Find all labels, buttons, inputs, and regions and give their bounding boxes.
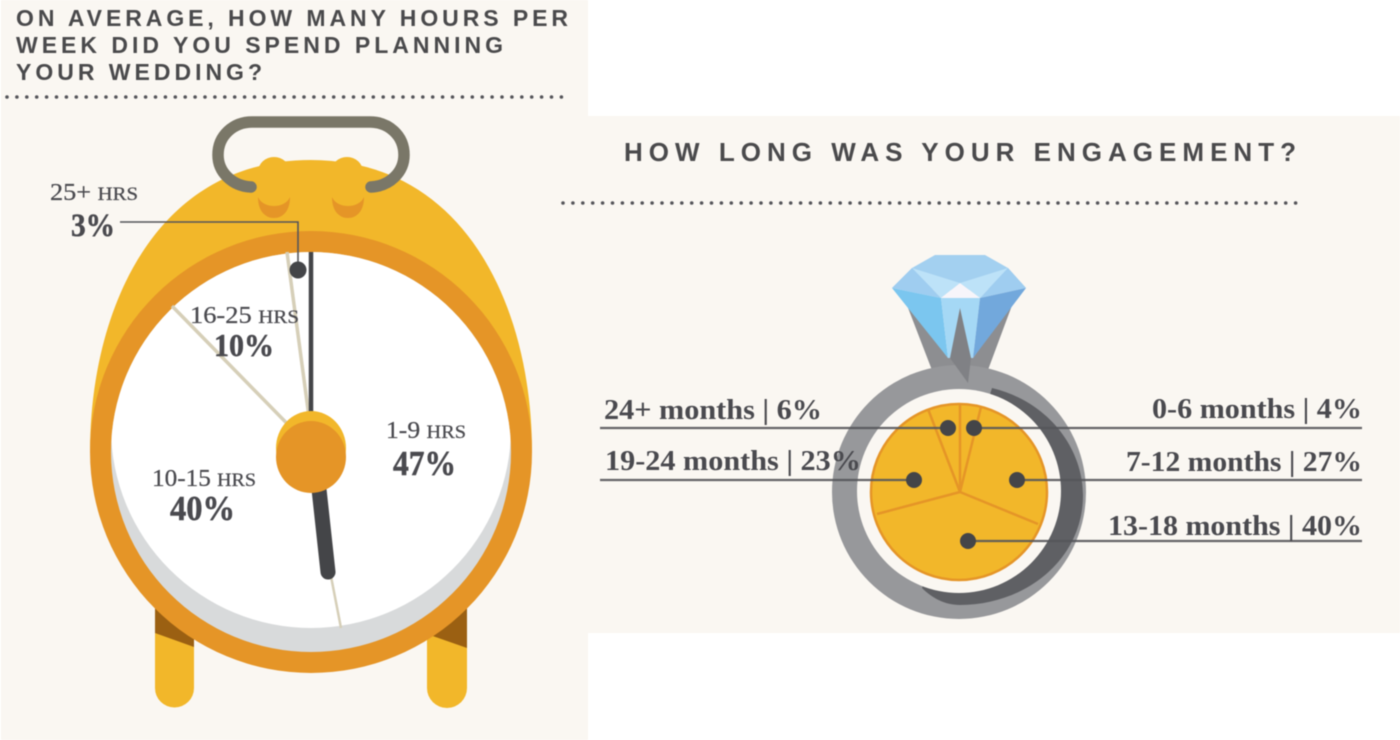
label: 0-6 months 4%: 0-6 months | 4%: [1152, 394, 1362, 425]
label: 13-18 months 40%: 13-18 months | 40%: [1108, 511, 1362, 542]
label: 25+ hours 3%: [50, 180, 138, 244]
label: 16-25 hours 10%: [190, 303, 299, 363]
heading: planning hours question: YOUR WEDDING?: [16, 59, 262, 85]
panel: engagement length: [563, 116, 1400, 633]
heading: engagement question: HOW LONG WAS YOUR ENGAGEMENT?: [624, 137, 1296, 167]
label: 10-15 hours 40%: [152, 466, 256, 528]
label: 16-25 hours 10%: 10%: [214, 327, 274, 363]
label: 1-9 hours 47%: 1-9 HRS: [386, 418, 466, 444]
label: 25+ hours 3%: 25+ HRS: [50, 180, 138, 206]
panel: planning hours: [1, 0, 588, 740]
slice dividers: [172, 252, 341, 628]
clock bells: [258, 157, 364, 218]
clock face shadow: [111, 252, 511, 652]
callout: 25+ hours pointer: [120, 222, 306, 278]
label: 1-9 hours 47%: 47%: [393, 444, 456, 483]
pie pointers: [600, 428, 1362, 541]
clock body: [90, 160, 532, 452]
heading: planning hours question: WEEK DID YOU SPEND PLANNING: [16, 32, 503, 58]
clock hub: [276, 411, 346, 493]
heading: planning hours question: [16, 5, 568, 85]
label: 7-12 months 27%: 7-12 months | 27%: [1126, 447, 1362, 478]
clock handle: [218, 122, 404, 187]
label: 24+ months 6%: 24+ months | 6%: [604, 395, 822, 426]
diamond: [892, 255, 1026, 383]
clock hour hand: [318, 480, 328, 572]
icon: alarm clock chart: [90, 122, 532, 708]
clock leg left: [155, 600, 194, 708]
clock rim: [90, 231, 532, 673]
label: 10-15 hours 40%: 10-15 HRS: [152, 466, 256, 492]
ring interior: [857, 389, 1061, 593]
pie markers: [906, 420, 1025, 549]
clock leg right: [427, 600, 467, 708]
label: 10-15 hours 40%: 40%: [170, 489, 235, 528]
clock face: [111, 228, 511, 628]
ring band: [832, 365, 1086, 619]
ring prongs: [905, 300, 1014, 383]
label: 25+ hours 3%: 3%: [71, 208, 115, 244]
icon: diamond ring chart: [600, 255, 1362, 619]
label: 1-9 hours 47%: [386, 418, 466, 483]
clock minute hand: [309, 252, 313, 420]
heading: planning hours question: ON AVERAGE, HOW MANY HOURS PER: [16, 5, 568, 31]
label: 19-24 months 23%: 19-24 months | 23%: [605, 446, 861, 477]
pie chart: [871, 404, 1047, 580]
label: 16-25 hours 10%: 16-25 HRS: [190, 303, 299, 329]
ring band shadow: [922, 388, 1083, 605]
